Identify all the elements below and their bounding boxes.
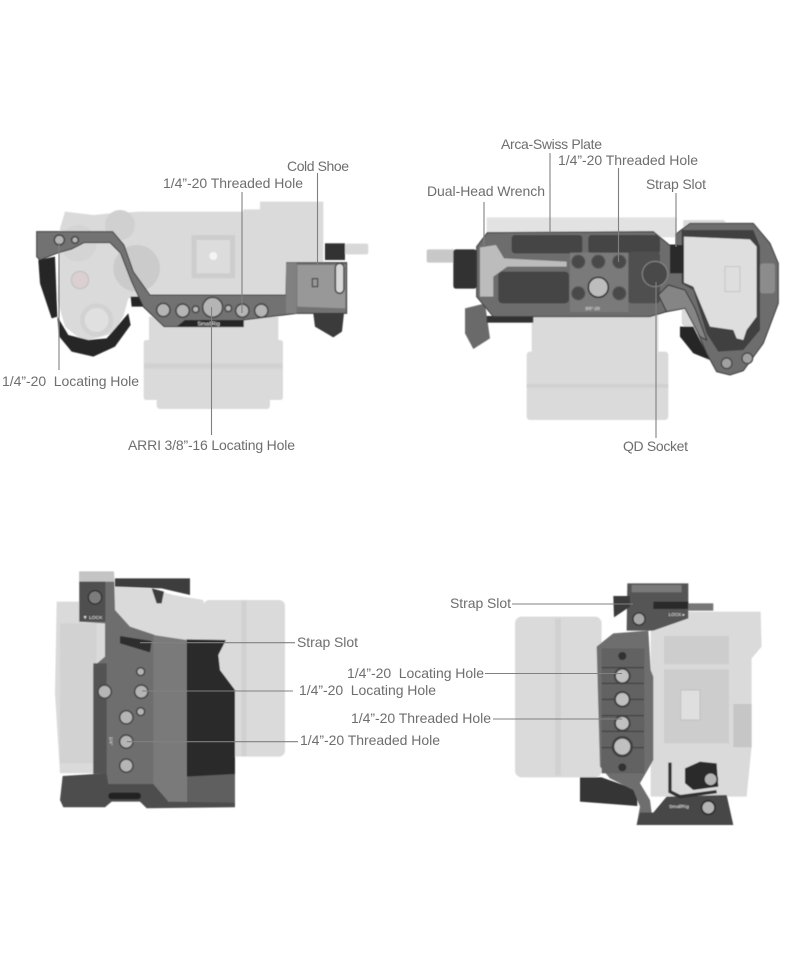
grip side camera body xyxy=(55,587,208,773)
grip side base plate xyxy=(60,773,235,808)
top view metal cage: SmallRig xyxy=(197,321,220,327)
plate side top clamp: LOCK ▸ xyxy=(669,612,686,617)
callout: bottom threaded hole: 1/4”-20 Threaded Hole xyxy=(558,152,698,168)
top view camera body xyxy=(57,202,323,342)
plate side camera body xyxy=(651,612,762,797)
grip side lens xyxy=(203,600,285,757)
callout: plate side threaded hole: 1/4”-20 Threaded Hole xyxy=(351,710,491,726)
callout: QD socket: QD Socket xyxy=(623,438,688,454)
grip side metal cage xyxy=(79,572,155,787)
callout: cold shoe xyxy=(287,158,349,265)
panel: top view of cage on camera xyxy=(37,202,368,409)
plate side lens xyxy=(515,617,602,777)
plate side metal cage xyxy=(597,631,653,825)
bottom view metal cage: 3/8"-20 xyxy=(585,306,600,311)
plate side bottom clamp xyxy=(637,762,733,825)
plate side grip edge xyxy=(580,777,637,806)
plate side top clamp xyxy=(613,583,713,631)
grip side top cold shoe bar xyxy=(115,578,190,603)
bottom view rubber grip xyxy=(680,327,710,360)
panel: bottom view of cage on camera xyxy=(427,217,778,420)
grip side metal cage: 1/4" xyxy=(108,737,114,746)
top view lens xyxy=(144,317,283,409)
callout: bottom strap slot: Strap Slot xyxy=(646,176,706,192)
callout: top locating hole: 1/4”-20 Locating Hole xyxy=(2,373,139,389)
callout: plate side locating hole: 1/4”-20 Locating Hole xyxy=(347,665,484,681)
bottom view wrench screw and knob xyxy=(427,249,533,349)
callout: grip side strap slot: Strap Slot xyxy=(297,634,358,650)
top view rubber grip xyxy=(38,257,344,357)
top view metal cage xyxy=(37,232,347,327)
callout: cold shoe: Cold Shoe xyxy=(287,158,349,174)
callout: ARRI locating hole: ARRI 3/8”-16 Locating Hole xyxy=(128,437,295,453)
callout: bottom strap slot xyxy=(646,176,706,247)
bottom view metal cage xyxy=(477,223,778,375)
callout: dual-head wrench xyxy=(427,183,545,247)
callout: grip side threaded hole: 1/4”-20 Threaded Hole xyxy=(300,732,440,748)
callout: grip side locating hole: 1/4”-20 Locating Hole xyxy=(299,682,436,698)
bottom view camera body xyxy=(487,217,777,363)
callout: plate side strap slot: Strap Slot xyxy=(450,595,511,611)
top view cold shoe wrench xyxy=(325,243,368,260)
callout: arca-swiss plate: Arca-Swiss Plate xyxy=(501,136,602,152)
callout: arca-swiss plate xyxy=(501,136,602,232)
callout: dual-head wrench: Dual-Head Wrench xyxy=(427,183,545,199)
grip side handgrip xyxy=(153,635,235,803)
panel: grip side view of cage on camera xyxy=(55,572,285,808)
bottom view lens xyxy=(527,315,668,420)
callout: top threaded hole: 1/4”-20 Threaded Hole xyxy=(163,175,303,191)
panel: plate side view of cage on camera xyxy=(515,583,762,825)
plate side bottom clamp: SmallRig xyxy=(669,804,689,810)
grip side metal cage: ▼ LOCK xyxy=(83,615,103,621)
